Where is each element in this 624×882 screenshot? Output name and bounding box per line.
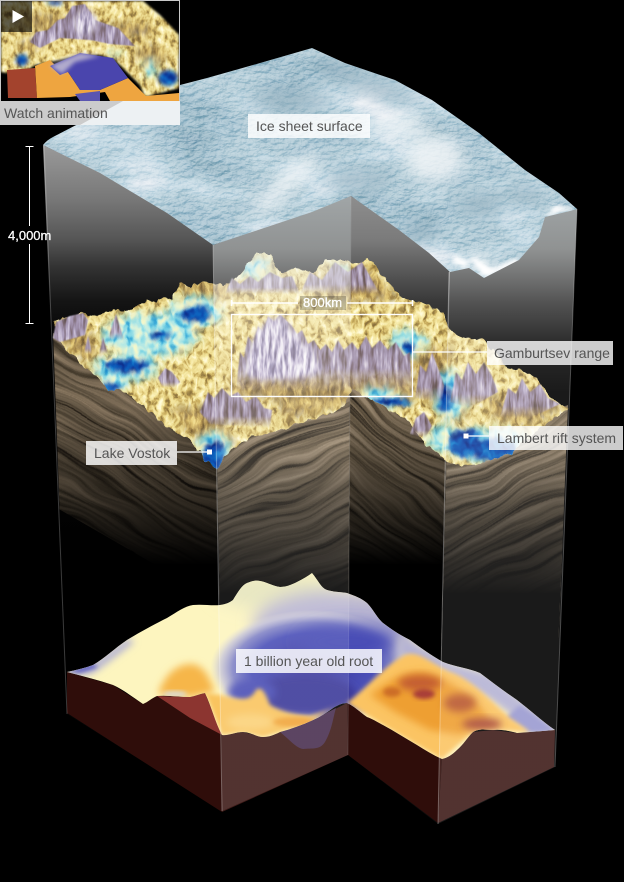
inset: white summit [74,9,96,35]
inset: blue basin [50,53,128,90]
root: red patches [398,675,442,691]
block: dark left faces [67,672,442,823]
ice: darker shaded hollows [250,50,543,244]
label: Gamburtsev range [413,341,613,365]
terrain: Gamburtsev subglacial mountains [52,252,568,470]
terrain base: yellow noise [54,252,568,470]
inset: cyan halos [107,51,157,78]
top cream-green wash [215,574,335,610]
terrain: ochre shaded slopes [53,270,568,445]
scale: 800km bracket [232,295,412,310]
root: left golden hump [158,664,215,697]
scale: 800km bracket: 800km [303,295,342,310]
terrain: deep blue lakes [101,306,517,471]
block: red interior behind the front corner [157,693,222,735]
inset: terrain lakes [16,1,178,86]
scale: 4,000m thickness [8,146,51,324]
ice sheet surface [43,48,577,278]
label: Lambert rift system: Lambert rift system [497,430,616,446]
block: right faces [222,703,555,823]
caption: Watch animation: Watch animation [4,105,108,121]
inset: terrain shading [12,13,166,65]
inset: lower root [75,91,100,101]
label: Lambert rift system [464,426,623,450]
terrain: cyan lake halos [91,258,532,470]
inset: lilac mountain [30,4,135,48]
icon: play button [1,1,32,32]
label: Gamburtsev range: Gamburtsev range [494,345,610,361]
label: Ice sheet surface [248,114,370,138]
bedrock strata cross-section [53,333,568,660]
root block: bottom 1 billion year old layer [60,565,560,823]
caption: Watch animation [0,101,180,125]
panel: back right wall of the ice column [348,196,450,824]
highlight box: Gamburtsev area [232,314,412,396]
label: Lake Vostok [86,441,212,465]
inset: red block [7,68,37,98]
root: right lilac slope [398,634,560,735]
left blue edge [60,638,134,675]
root: lilac halo [253,591,417,659]
block: purple root seen through the face [280,708,336,749]
ice: surface texture [44,48,576,278]
strata: centre-right face [348,388,446,660]
root: central golden ridge [205,689,347,737]
terrain: white summit [244,317,322,380]
label: Ice sheet surface: Ice sheet surface [256,118,363,134]
scale: 4,000m thickness: 4,000m [8,228,51,243]
inset: animation thumbnail [1,1,179,101]
inset: basin lilac edge [50,53,100,74]
strata: left face [53,333,220,596]
root surface [60,565,560,765]
inset frame [0,0,180,124]
label: Lake Vostok: Lake Vostok [94,445,171,461]
root: blue basin [213,612,402,722]
label: 1 billion year old root: 1 billion year old root [244,653,373,669]
column edges [44,145,577,824]
terrain: lilac spiked peaks [53,262,560,438]
panel: front left glass wall [213,196,351,811]
panel: front right glass wall [438,209,577,824]
panel: back left wall of the ice column [43,145,222,811]
strata: centre-left face [217,394,350,605]
terrain ground: yellow land, ochre slopes and blue lakes [54,252,568,470]
panel: watch animation button [0,0,180,101]
label: 1 billion year old root [236,649,382,673]
ice: bright drift patches [245,115,494,269]
strata: right face [441,405,568,661]
inset: orange band [35,60,179,101]
root: right orange plateau [347,654,530,759]
inset: terrain [1,1,179,97]
ice: white front rim [452,205,576,277]
